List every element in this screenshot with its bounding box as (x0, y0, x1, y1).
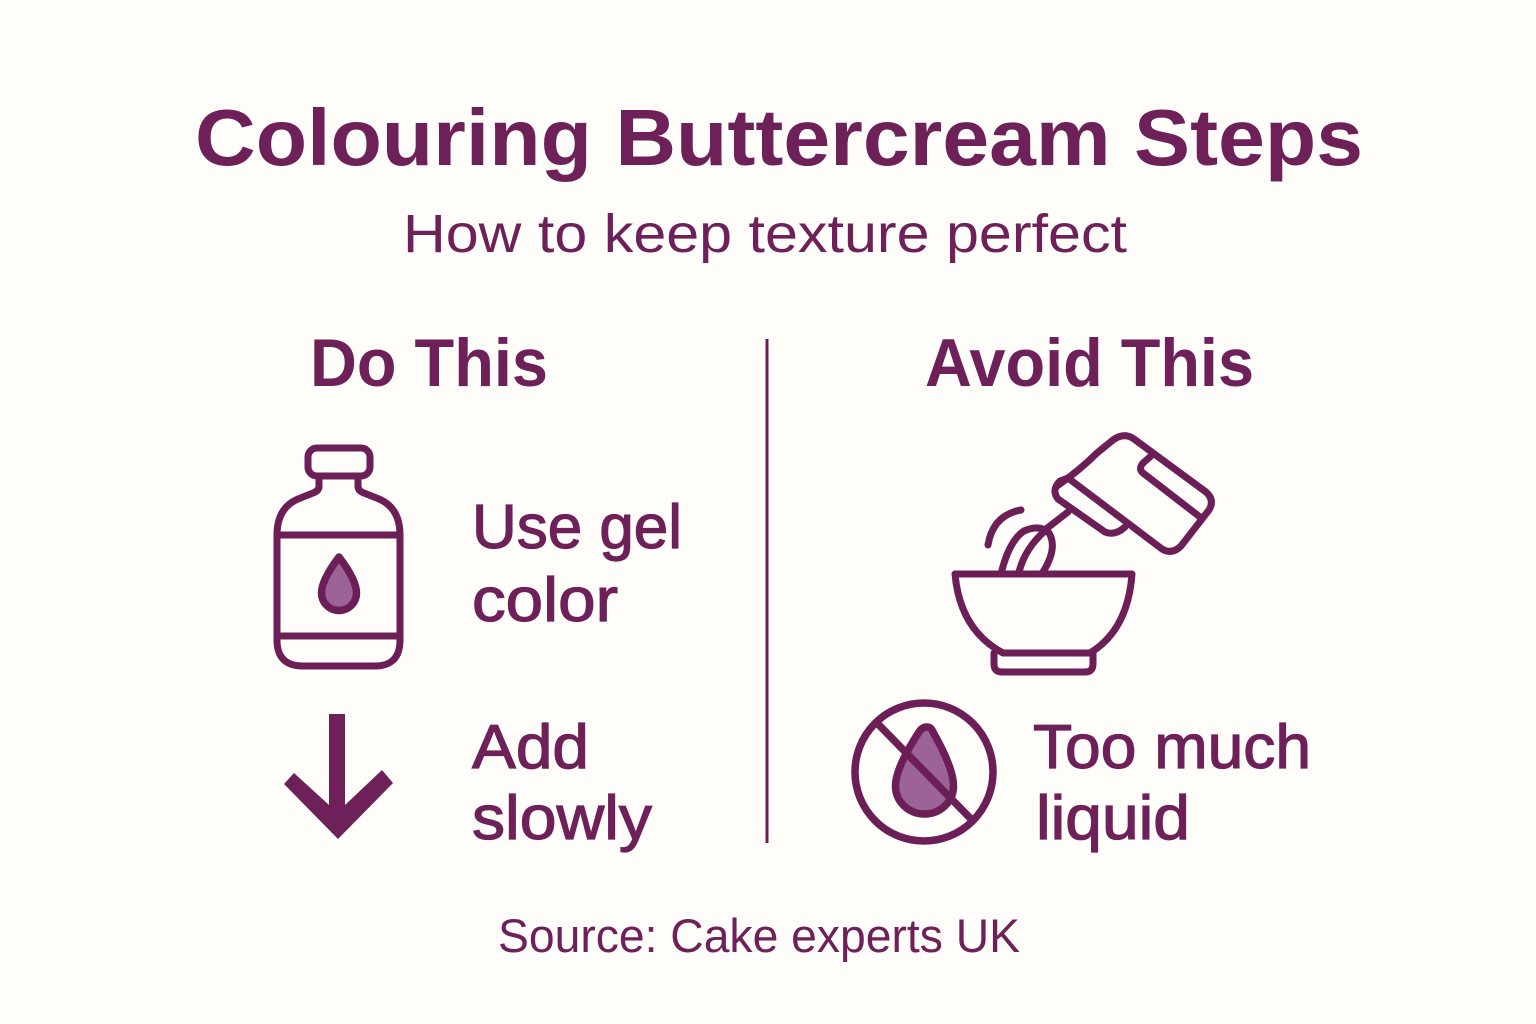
bowl foot (994, 653, 1093, 672)
handle slot (1140, 456, 1200, 517)
icon: gel colour bottle (277, 448, 400, 666)
text: add slowly (472, 713, 652, 853)
subtitle: How to keep texture perfect (403, 204, 1127, 264)
text: use gel color (472, 493, 682, 635)
source: Source: Cake experts UK (498, 909, 1020, 962)
divider (766, 339, 768, 843)
mixer pod (1055, 478, 1125, 533)
text: too much liquid: Too much (1033, 713, 1311, 782)
icon: down arrow (284, 714, 393, 839)
text: use gel color: color (472, 566, 618, 635)
whisk (1002, 512, 1068, 572)
bowl (955, 574, 1132, 653)
motion arc (988, 510, 1021, 545)
text: too much liquid: liquid (1036, 784, 1190, 853)
heading: do this: Do This (310, 325, 548, 401)
text: use gel color: Use gel (472, 493, 682, 562)
mixer body (1057, 436, 1211, 551)
icon: hand mixer and bowl (955, 436, 1211, 672)
text: too much liquid (1033, 713, 1311, 853)
title: Colouring Buttercream Steps (195, 93, 1363, 182)
heading: avoid this: Avoid This (925, 325, 1254, 401)
icon: no liquid (855, 703, 993, 841)
text: add slowly: Add (472, 713, 589, 782)
text: add slowly: slowly (472, 784, 652, 853)
